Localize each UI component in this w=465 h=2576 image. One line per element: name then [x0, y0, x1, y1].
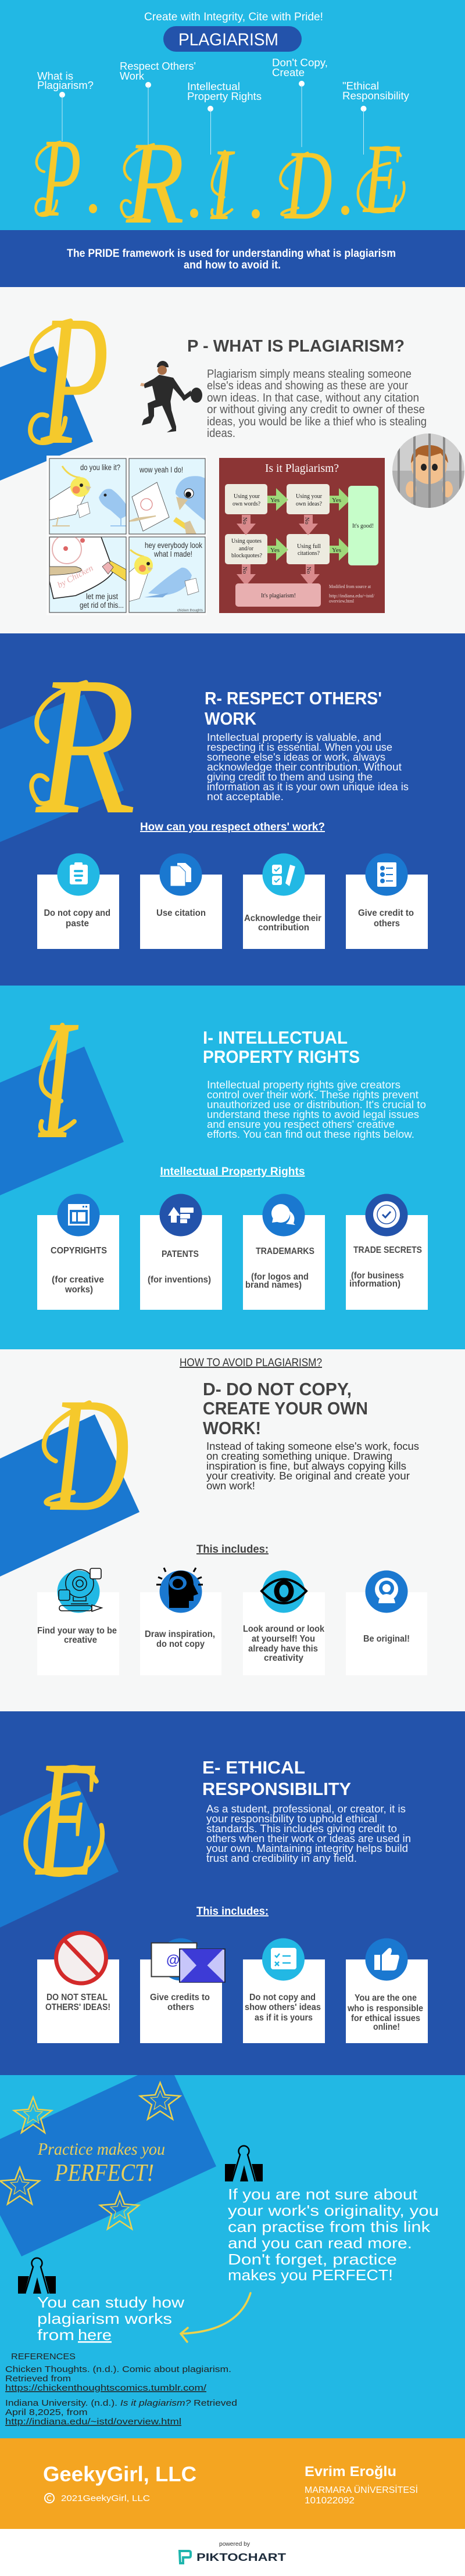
card: patents: PATENTS [162, 1249, 199, 1259]
card: acknowledge: contribution [258, 923, 309, 933]
heading [202, 1757, 351, 1799]
card: trademarks: TRADEMARKS [256, 1246, 314, 1256]
body text: acknowledge their contribution. Without [207, 761, 402, 773]
comic panel 2: wow yeah I do! [139, 465, 183, 474]
icon: thief [140, 361, 202, 432]
card: use citation [140, 853, 222, 949]
icon: prohibited sign [56, 1933, 106, 1983]
icon: thumbs up [374, 1948, 399, 1970]
label: intellectual property rights: Property Rights [187, 91, 262, 102]
callout text: study [37, 2294, 184, 2344]
panel: E ethical responsibility [0, 1711, 465, 2075]
comic panel 3: let me just [86, 592, 118, 601]
flow text: Yes [270, 497, 280, 504]
card: be original: Be original! [363, 1634, 410, 1644]
icon: checklist and pencil [272, 865, 295, 886]
panel: header [0, 0, 465, 249]
callout text: originality: and you can read more. [228, 2234, 412, 2252]
references: Chicken Thoughts. (n.d.). Comic about plagiarism. [5, 2364, 231, 2374]
big letter D: D [49, 1364, 130, 1545]
card: give credit: Give credit to [358, 908, 414, 918]
flow source note: http://indiana.edu/~istd/ [329, 593, 375, 599]
body text: understand these rights to avoid legal issues [207, 1109, 419, 1120]
body text [206, 1803, 411, 1864]
body text: others when their work or ideas are used in [206, 1833, 411, 1844]
flow text: It's plagiarism! [261, 593, 296, 599]
title pill: PLAGIARISM [178, 30, 278, 49]
flow text: It's good! [352, 523, 374, 529]
label: what is plagiarism: What is [37, 70, 73, 82]
icon: documents [170, 863, 191, 886]
flow text: No [303, 517, 310, 524]
heading: R- RESPECT OTHERS' [205, 688, 382, 708]
card: responsible: for ethical issues [351, 2013, 420, 2023]
references: Retrieved from [5, 2374, 71, 2384]
big letter I: I [37, 984, 79, 1174]
icon: piktochart logo [180, 2551, 191, 2563]
big letter P: P [39, 277, 109, 483]
label: do not copy: Don't Copy, [272, 57, 328, 69]
comic panel 3: by Chicken [56, 564, 95, 590]
label: intellectual property rights [187, 81, 262, 155]
flow text: blockquotes? [231, 553, 263, 559]
callout text: originality: Don't forget, practice [228, 2251, 397, 2268]
body text: ideas. [207, 427, 235, 440]
heading: WORK [205, 708, 257, 729]
result boxes [235, 486, 378, 607]
comic panel 4: hey everybody look [145, 540, 203, 550]
icon: window [68, 1204, 90, 1226]
flow text: Using full [297, 543, 321, 550]
label: ethical responsibility: "Ethical [342, 80, 379, 92]
flow text: Using quotes [231, 538, 262, 544]
card: look around: already have this [248, 1644, 318, 1654]
heading: CREATE YOUR OWN [203, 1398, 368, 1418]
callout text: originality: can practise from this link [228, 2218, 431, 2235]
card: acknowledge: Acknowledge their [244, 913, 321, 923]
subheading: This includes: [196, 1905, 269, 1918]
card: responsible: You are the one [355, 1993, 417, 2003]
card: do not copy and paste [37, 853, 119, 949]
icon: checklist [271, 1948, 296, 1969]
icon: speech bubbles [271, 1204, 295, 1225]
flow boxes [225, 484, 330, 564]
references: REFERENCES [11, 2352, 76, 2362]
panel: D do not copy [0, 1349, 465, 1711]
body text: Intellectual property is valuable, and [207, 732, 381, 743]
icon: person with gear [375, 1578, 398, 1603]
icon: clipboard [70, 862, 88, 884]
card: give credits: Give credits to [150, 1993, 210, 2002]
body text: inspiration is fine, but always copying kills [206, 1460, 406, 1472]
script text: practice makes you perfect: PERFECT! [54, 2160, 154, 2187]
card: be original [346, 1570, 427, 1675]
body text: Instead of taking someone else's work, focus [206, 1441, 419, 1452]
company name: GeekyGirl, LLC [43, 2462, 196, 2486]
large word: P.R.I.D.E: E [362, 124, 401, 234]
body text: giving credit to them and using the [207, 771, 373, 783]
flow text: Yes [332, 547, 341, 554]
card: find your way: Find your way to be [37, 1626, 117, 1636]
heading: WORK! [203, 1418, 261, 1438]
callout text: originality: your work's originality, you [228, 2202, 439, 2219]
icon: arrow and bars [168, 1207, 194, 1223]
big letter D [44, 1364, 130, 1545]
card: acknowledge [243, 853, 325, 949]
body text: not acceptable. [207, 791, 284, 802]
body text: respecting it is essential. When you use [207, 741, 392, 753]
section title: how to avoid plagiarism: HOW TO AVOID PLAGIARISM? [180, 1357, 322, 1369]
subheading: How can you respect others' work? [140, 821, 325, 833]
comic panel 4 [129, 537, 205, 612]
body text [207, 732, 409, 802]
heading: PROPERTY RIGHTS [203, 1047, 360, 1067]
card: do not copy and paste: Do not copy and [44, 908, 110, 918]
large word: P.R.I.D.E: R [125, 117, 184, 249]
card: do not copy and show: Do not copy and [249, 1993, 316, 2002]
comic panel 2 [129, 458, 205, 534]
subheading: Intellectual Property Rights [160, 1166, 305, 1178]
body text: your creativity. Be original and create your [206, 1470, 410, 1482]
flow text: Yes [270, 547, 280, 554]
body text: and ensure you respect others' creative [207, 1119, 395, 1130]
body text: standards. This includes giving credit to [206, 1823, 397, 1835]
card: copyrights: (for creative [52, 1275, 104, 1285]
flow source note: Modified from source at [329, 584, 371, 589]
big letter R: R [34, 635, 136, 855]
body text [207, 368, 427, 440]
comic: chicken thoughts [46, 456, 207, 615]
card: trade secrets: information) [349, 1279, 400, 1289]
card: trade secrets: TRADE SECRETS [353, 1245, 422, 1255]
card: copyrights: COPYRIGHTS [51, 1246, 107, 1256]
label: respect others [120, 60, 196, 145]
card: look around: creativity [264, 1653, 303, 1663]
body text: unauthorized use or distribution. It's crucial to [207, 1099, 426, 1110]
callout text: study: from [37, 2326, 74, 2344]
tagline: Create with Integrity, Cite with Pride! [144, 11, 323, 23]
card: trademarks [243, 1194, 325, 1310]
flow text: No [241, 567, 248, 574]
label: what is plagiarism [37, 70, 94, 141]
flow text: and/or [239, 546, 254, 552]
callout text: study: You can study how [37, 2294, 184, 2311]
flow text: No [241, 517, 248, 524]
card: do not copy and show [243, 1939, 325, 2043]
flow text: own ideas? [296, 501, 323, 507]
heading: I- INTELLECTUAL [203, 1027, 348, 1048]
author name: Evrim Eroğlu [305, 2464, 396, 2480]
card: do not steal: OTHERS' IDEAS! [45, 2002, 110, 2012]
body text [206, 1441, 419, 1492]
card: patents [140, 1194, 222, 1310]
panel: practice [0, 2075, 465, 2438]
big letter E: E [34, 1726, 97, 1911]
panel: framework statement: The PRIDE framework is used for understanding what is plagiarism [67, 248, 396, 260]
arrow [181, 2293, 251, 2342]
large word: P.R.I.D.E: D [284, 130, 332, 241]
heading [203, 1027, 360, 1067]
comic panel 4: what I made! [153, 549, 192, 558]
references [5, 2352, 237, 2427]
body text: ideas, you would be like a thief who is stealing [207, 415, 427, 428]
comic panel 3: get rid of this... [80, 601, 124, 610]
icon: copyright [45, 2493, 54, 2503]
icon: head [156, 1568, 203, 1608]
icon: person in jail [392, 433, 465, 508]
body text: control over their work. These rights prevent [207, 1089, 419, 1101]
card: give credits: others [167, 2002, 194, 2012]
flow text: Using your [296, 493, 323, 500]
body text: on creating something unique. Drawing [206, 1450, 392, 1462]
card: trademarks: brand names) [245, 1280, 302, 1290]
body text: own ideas. In that case, without any citation [207, 392, 419, 404]
label: respect others: Work [120, 70, 145, 82]
big letter E [26, 1726, 102, 1911]
callout text: study: here [78, 2326, 112, 2344]
icon: eye [262, 1579, 306, 1603]
card: find your way: creative [64, 1635, 97, 1645]
callout text: originality [228, 2186, 439, 2284]
panel: powered by piktochart: PIKTOCHART [196, 2552, 286, 2563]
references: April 8,2025, from [5, 2407, 87, 2417]
panel: framework statement [0, 230, 465, 287]
body text: else's ideas and showing as these are your [207, 379, 408, 392]
body text: As a student, professional, or creator, it is [206, 1803, 406, 1815]
panel: I intellectual property rights [0, 984, 465, 1349]
author details: MARMARA ÜNİVERSİTESİ [305, 2484, 418, 2495]
icon: email [151, 1943, 225, 1982]
label: ethical responsibility: Responsibility [342, 90, 409, 102]
script text: practice makes you perfect: Practice makes you [37, 2140, 165, 2159]
panel: powered by piktochart [0, 2529, 465, 2576]
icon: binder clip right [225, 2146, 263, 2181]
card: look around [243, 1570, 325, 1675]
card: give credit: others [374, 919, 400, 929]
panel: powered by piktochart: powered by [219, 2541, 250, 2548]
large word: P.R.I.D.E [35, 115, 404, 249]
title pill [163, 26, 302, 52]
card: trademarks: (for logos and [251, 1272, 309, 1282]
card: trade secrets [346, 1194, 428, 1310]
copyright text: 2021GeekyGirl, LLC [61, 2493, 150, 2503]
heading: E- ETHICAL [202, 1757, 305, 1778]
comic panel 1 [49, 458, 126, 534]
heading [203, 1379, 368, 1438]
heading: RESPONSIBILITY [202, 1779, 351, 1799]
references: http://indiana.edu/~istd/overview.html [5, 2417, 181, 2427]
comic panel 3 [49, 535, 126, 612]
label: respect others: Respect Others' [120, 60, 196, 72]
card: do not copy and paste: paste [66, 919, 89, 929]
panel: R respect others work [0, 633, 465, 986]
label: intellectual property rights: Intellectual [187, 81, 240, 92]
card: give credit [346, 853, 428, 949]
card: patents: (for inventions) [148, 1275, 211, 1285]
card: responsible: who is responsible [347, 2004, 423, 2013]
panel: P what is plagiarism [0, 277, 465, 633]
flow text: citations? [298, 550, 320, 557]
label: what is plagiarism: Plagiarism? [37, 80, 94, 91]
author details [305, 2484, 418, 2506]
heading [205, 688, 382, 729]
author details: 101022092 [305, 2496, 355, 2506]
body text: someone else's ideas or work, always [207, 751, 385, 763]
flow text: own words? [233, 501, 261, 507]
icon: badge check [373, 1201, 400, 1228]
label: do not copy: Create [272, 67, 305, 78]
flow source note [329, 584, 375, 604]
subheading: This includes: [196, 1543, 269, 1556]
heading: D- DO NOT COPY, [203, 1379, 352, 1399]
icon: list [377, 862, 396, 887]
card: do not steal [37, 1933, 119, 2043]
label: ethical responsibility [342, 80, 409, 155]
card: use citation: Use citation [156, 908, 206, 918]
flow source note: overview.html [329, 599, 355, 604]
red no arrows [237, 515, 320, 586]
callout text: study: plagiarism works [37, 2310, 172, 2327]
flowchart: is it plagiarism [219, 458, 385, 613]
card: do not copy and show: show others' ideas [245, 2002, 321, 2012]
body text: Plagiarism simply means stealing someone [207, 368, 412, 381]
body text: your responsibility to uphold ethical [206, 1813, 377, 1825]
body text: information as it is your own unique idea is [207, 781, 409, 793]
card: copyrights [37, 1194, 119, 1310]
card: give credits [140, 1939, 225, 2043]
heading: P - WHAT IS PLAGIARISM? [187, 337, 405, 356]
comic panel 1: do you like it? [80, 463, 120, 472]
flow text: Using your [234, 493, 260, 500]
callout text: originality: If you are not sure about [228, 2186, 418, 2203]
card: draw inspiration [140, 1568, 221, 1675]
script text: practice makes you perfect [37, 2140, 165, 2187]
stars [0, 2083, 180, 2229]
comic panel 4: chicken thoughts [177, 609, 203, 612]
icon: light bulb [59, 1568, 102, 1611]
label: do not copy [272, 57, 328, 147]
card: draw inspiration: do not copy [156, 1639, 205, 1649]
body text: trust and credibility in any field. [206, 1853, 357, 1864]
body text: your own. Maintaining integrity helps build [206, 1843, 408, 1854]
callout text: originality: makes you PERFECT! [228, 2266, 393, 2284]
large word: P.R.I.D.E: I [210, 127, 235, 242]
flow text: No [305, 567, 312, 574]
green yes arrows [267, 488, 350, 561]
big letter I [37, 984, 79, 1174]
large word: P.R.I.D.E: P [39, 115, 81, 240]
card: responsible: online! [373, 2022, 400, 2032]
flow text [231, 493, 374, 599]
body text: efforts. You can find out these rights below. [207, 1128, 414, 1140]
body text: Intellectual property rights give creators [207, 1079, 400, 1091]
card: look around: Look around or look [243, 1624, 324, 1634]
flowchart: is it plagiarism: Is it Plagiarism? [265, 462, 339, 475]
panel: framework statement: and how to avoid it. [184, 259, 281, 271]
body text: or without giving any credit to owner of these [207, 403, 425, 416]
references: https://chickenthoughtscomics.tumblr.com/ [5, 2383, 207, 2393]
big letter P [30, 277, 109, 483]
panel: orange footer [0, 2438, 465, 2529]
card: draw inspiration: Draw inspiration, [145, 1629, 215, 1639]
card: do not copy and show: as if it is yours [255, 2013, 313, 2023]
card: responsible [346, 1939, 428, 2043]
card: do not steal: DO NOT STEAL [46, 1993, 108, 2002]
card: look around: at yourself! You [252, 1634, 315, 1644]
icon: binder clip left [18, 2258, 56, 2294]
flow text: Yes [332, 497, 341, 504]
card: find your way [37, 1568, 119, 1675]
icon: email: @ [166, 1952, 180, 1968]
body text: own work! [206, 1480, 255, 1492]
card: copyrights: works) [65, 1285, 93, 1295]
body text [207, 1079, 426, 1140]
card: trade secrets: (for business [351, 1271, 404, 1281]
references: Indiana University. (n.d.). Is it plagiarism? Retrieved [5, 2398, 237, 2408]
